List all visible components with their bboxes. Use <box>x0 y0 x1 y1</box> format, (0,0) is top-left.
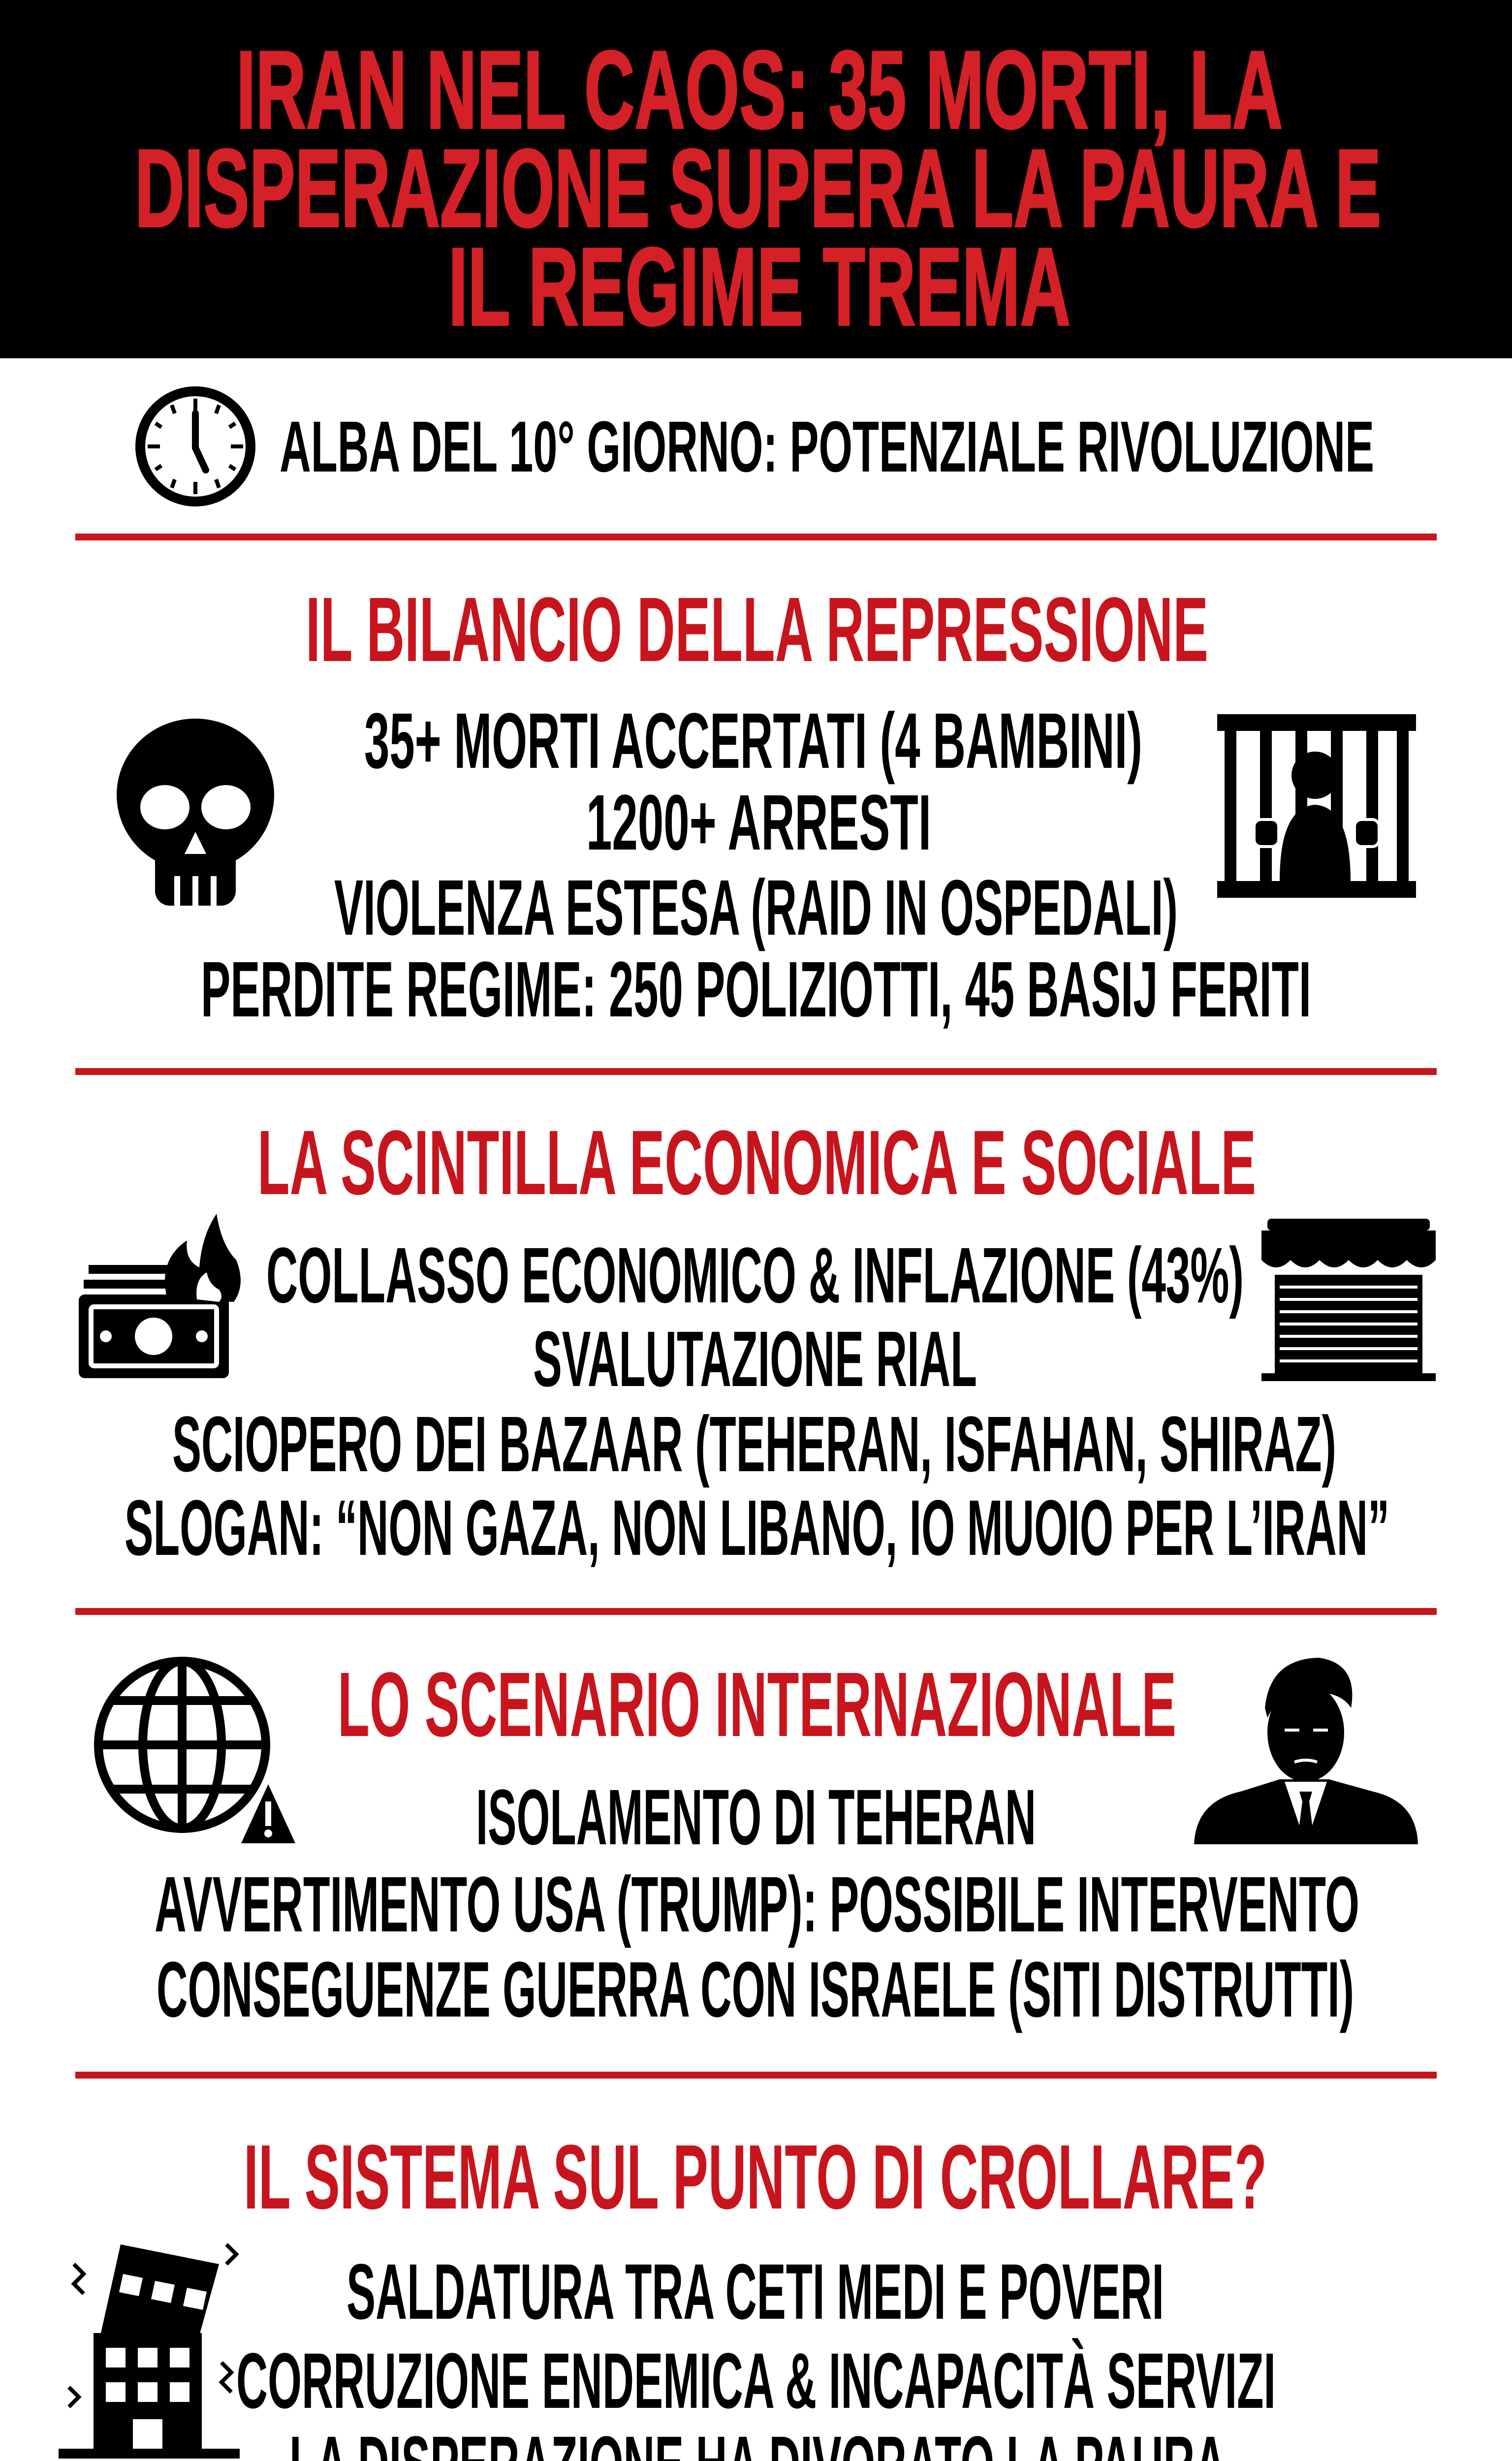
text block: collapse facts <box>142 2247 1373 2461</box>
text block: repression facts: 1200+ ARRESTI <box>586 778 931 866</box>
icon: closed shop <box>1261 1219 1436 1381</box>
panel: economic and social spark <box>79 1112 1436 1572</box>
icon: globe with warning <box>98 1661 300 1848</box>
icon: clock <box>140 391 251 502</box>
icon: burning money <box>79 1214 241 1378</box>
icon: skull <box>117 719 274 907</box>
text block: international facts <box>155 1773 1359 2033</box>
icon: jail <box>1217 714 1416 898</box>
text block: economic facts <box>125 1231 1389 1572</box>
text block: international facts: ISOLAMENTO DI TEHERAN <box>476 1773 1036 1861</box>
icon: Trump silhouette <box>1194 1658 1418 1844</box>
panel: international scenario <box>98 1654 1418 2033</box>
text block: repression facts <box>201 696 1311 1033</box>
icon: collapsing building <box>59 2244 240 2459</box>
header: title band: IL REGIME TREMA <box>448 224 1071 348</box>
panel: system collapsing <box>59 2126 1373 2461</box>
panel: repression balance <box>117 579 1416 1033</box>
header: title band <box>0 0 1512 358</box>
text block: economic facts: SVALUTAZIONE RIAL <box>533 1315 977 1403</box>
